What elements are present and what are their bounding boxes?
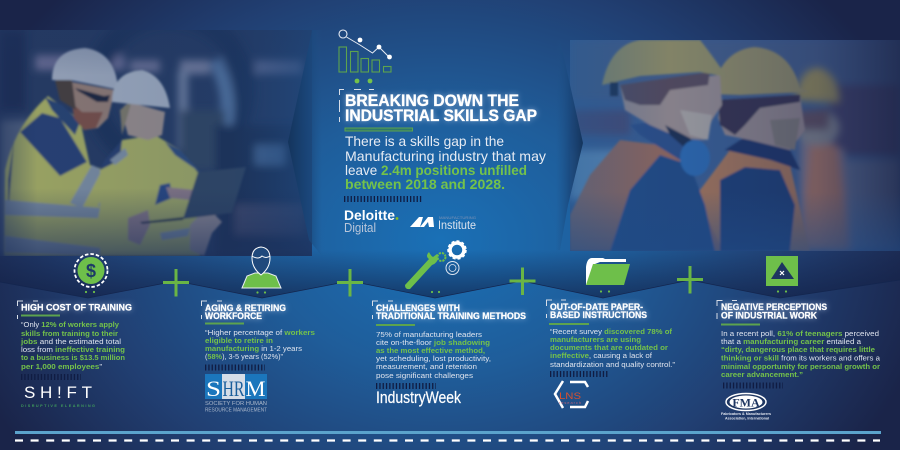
logo: FMA: FMA	[732, 396, 760, 410]
logo: FMA: Fabricators & Manufacturers	[721, 412, 771, 416]
intro text: There is a skills gap in the	[345, 133, 504, 149]
intro text: leave 2.4m positions unfilled	[345, 162, 527, 178]
body text: loss from ineffective training	[21, 345, 125, 354]
logo: FMA: Association, International	[725, 416, 769, 420]
body text: (58%), 3-5 years (52%)”	[205, 352, 283, 361]
top dashed line	[15, 13, 880, 16]
body text: pose significant challenges	[376, 371, 473, 380]
icon: warning square	[766, 256, 798, 293]
photo: workers in hard hats	[570, 40, 900, 251]
heading	[721, 302, 828, 322]
plus connectors	[163, 266, 703, 296]
header block	[340, 90, 546, 199]
heading	[376, 303, 527, 322]
body text: skills from training to their	[21, 329, 118, 338]
icon: dollar coin: $	[86, 261, 96, 281]
logo: SHRM: RESOURCE MANAGEMENT	[205, 408, 267, 414]
body text: standardization and quality control.”	[550, 360, 675, 369]
logo: LNS Research	[555, 381, 588, 408]
logo: Shift	[21, 383, 95, 408]
body text: ineffective, causing a lack of	[550, 351, 653, 360]
bottom dashed line	[15, 439, 880, 442]
body text: jobs and the estimated total	[20, 337, 121, 346]
body text: “Recent survey discovered 78% of	[550, 327, 672, 336]
heading: OUT-OF-DATE PAPER-	[550, 302, 643, 313]
icon: worker	[242, 247, 281, 294]
body text	[376, 330, 491, 380]
body text	[550, 327, 675, 369]
icon: folder	[586, 258, 630, 293]
body text: yet scheduling, lost productivity,	[376, 354, 491, 363]
body text: measurement, and retention	[376, 362, 477, 371]
body text: thinking or skill from its workers and offers a	[721, 354, 881, 362]
right photo chevron	[556, 40, 583, 250]
logo: SHRM	[205, 374, 267, 414]
main title: INDUSTRIAL SKILLS GAP	[345, 106, 537, 125]
heading	[550, 302, 648, 321]
logo: LNS Research: LNS	[559, 391, 581, 402]
logo: SHRM: M	[246, 376, 266, 401]
main title	[345, 91, 537, 125]
logo: IndustryWeek: IndustryWeek	[376, 389, 462, 407]
logo: SHRM: SOCIETY FOR HUMAN	[205, 401, 267, 407]
intro text: Manufacturing industry that may	[345, 148, 546, 164]
body text: “dirty, dangerous place that requires little	[721, 345, 875, 354]
chevron band divider	[0, 250, 900, 298]
logo: SHRM: S	[206, 376, 221, 401]
body text: manufacturing in 1-2 years	[205, 344, 302, 353]
body text	[721, 329, 881, 379]
title underline	[345, 128, 412, 131]
logo: Shift: DISRUPTIVE ELEARNING	[21, 404, 95, 408]
logo: Deloitte Digital: Deloitte	[344, 208, 395, 223]
logo: FMA	[721, 394, 771, 420]
logo: Deloitte Digital: Digital	[344, 220, 376, 235]
heading: NEGATIVE PERCEPTIONS	[721, 302, 828, 313]
card: traditional training methods	[372, 301, 527, 407]
body text: as the most effective method,	[376, 346, 485, 355]
heading: OF INDUSTRIAL WORK	[721, 310, 817, 322]
logo: Manufacturing Institute: MANUFACTURING	[439, 216, 476, 220]
logo: Manufacturing Institute: Institute	[438, 220, 476, 232]
logo: Deloitte Digital	[344, 208, 398, 235]
heading: TRADITIONAL TRAINING METHODS	[376, 311, 527, 322]
heading: CHALLENGES WITH	[376, 303, 460, 314]
body text: “Higher percentage of workers	[205, 328, 315, 337]
icon: dollar coin	[74, 254, 108, 293]
card: high cost of training	[18, 301, 132, 408]
heading: BASED INSTRUCTIONS	[550, 310, 648, 321]
photo: engineers with laptop	[0, 15, 312, 256]
heading: HIGH COST OF TRAINING	[21, 302, 132, 314]
intro text	[345, 133, 546, 192]
body text: cite on-the-floor job shadowing	[376, 338, 490, 347]
body text: manufacturers are using	[550, 335, 641, 344]
body text: eligible to retire in	[205, 336, 273, 345]
card: negative perceptions	[717, 300, 881, 420]
intro text: between 2018 and 2028.	[345, 176, 505, 192]
card: out-of-date paper-based instructions	[546, 300, 675, 408]
left photo chevron	[288, 30, 322, 256]
central icon: declining chart	[339, 30, 392, 83]
body text: 75% of manufacturing leaders	[376, 330, 482, 339]
main title: BREAKING DOWN THE	[345, 91, 519, 110]
body text	[20, 320, 125, 371]
logo: LNS Research: research	[559, 400, 581, 405]
body text: that a manufacturing career entailed a	[721, 337, 862, 346]
body text	[205, 328, 315, 361]
body text: minimal opportunity for personal growth or	[721, 362, 880, 371]
logo: Manufacturing Institute	[410, 216, 476, 232]
body text: career advancement.”	[721, 370, 803, 379]
body text: per 1,000 employees ”	[21, 362, 102, 371]
bottom blue rule	[15, 431, 881, 434]
body text: documents that are outdated or	[550, 343, 668, 352]
body text: “Only 12% of workers apply	[21, 320, 120, 329]
heading: AGING & RETIRING	[205, 303, 286, 314]
heading	[205, 303, 286, 322]
logo: Shift: SH!FT	[24, 383, 92, 402]
body text: In a recent poll, 61% of teenagers perceived	[721, 329, 879, 338]
logo: SHRM: HR	[222, 376, 245, 401]
body text: to a business is $13.5 million	[21, 353, 125, 362]
card: aging and retiring workforce	[202, 301, 315, 414]
heading: WORKFORCE	[205, 311, 263, 322]
tick bar	[344, 196, 422, 202]
icon: wrench and gears	[405, 241, 466, 293]
